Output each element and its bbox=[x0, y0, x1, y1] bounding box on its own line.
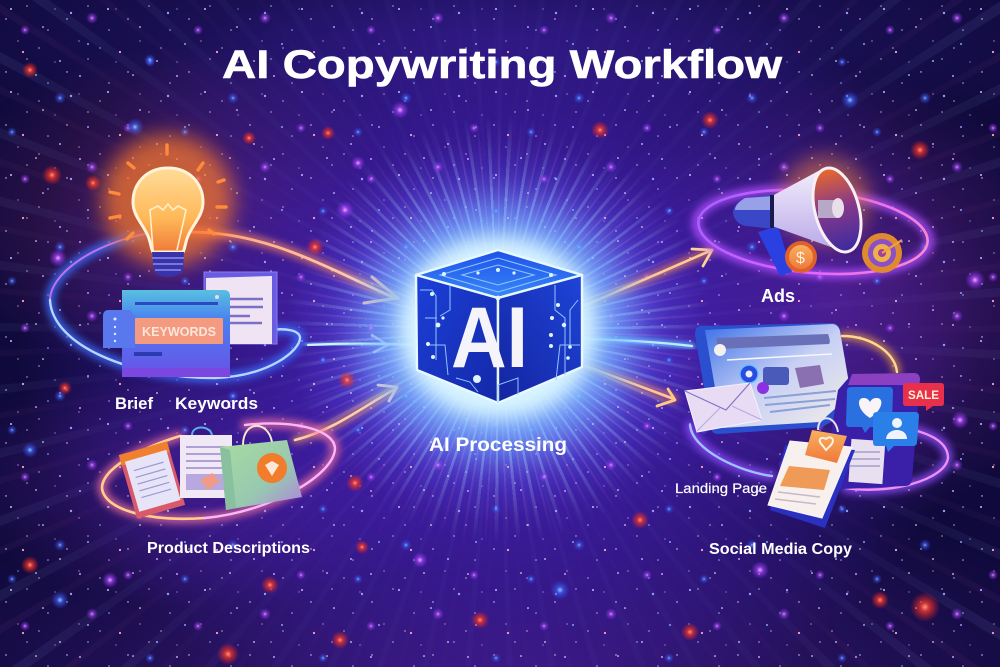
icon: heart bubble bbox=[846, 387, 893, 433]
icon: dollar coin bbox=[785, 241, 817, 273]
orbit ring: brief bbox=[50, 234, 300, 378]
cube outer glow bbox=[363, 205, 633, 455]
icon: light bulb bbox=[102, 134, 234, 277]
orbit ring: ads bbox=[693, 181, 933, 283]
label: Brief: Brief bbox=[115, 394, 153, 413]
circuit traces bbox=[420, 258, 580, 403]
arrow: AI to email and social bbox=[586, 366, 675, 406]
panel: AI cube bbox=[363, 205, 633, 455]
label: Ads: Ads bbox=[761, 286, 795, 306]
arrow: AI to ads bbox=[586, 249, 712, 305]
icon: product sheet bbox=[180, 428, 232, 498]
icon: brief folder bbox=[103, 290, 230, 377]
icon: social panel bbox=[822, 373, 920, 490]
arrow: keywords to AI bbox=[308, 335, 412, 352]
label: AI Processing: AI Processing bbox=[429, 435, 567, 456]
label: Social Media Copy: Social Media Copy bbox=[709, 541, 852, 558]
orbit ring: product bbox=[102, 424, 335, 519]
icon: shopping bag bbox=[220, 426, 302, 510]
keywords tag bbox=[135, 318, 223, 344]
arrow: AI to landing page bbox=[584, 339, 692, 346]
title: AI Copywriting Workflow bbox=[222, 43, 783, 87]
panel: brief and keywords bbox=[50, 134, 300, 378]
icon: dollar coin: $ bbox=[796, 250, 805, 267]
badge: sale: SALE bbox=[908, 388, 939, 402]
keywords tag: KEYWORDS bbox=[142, 325, 216, 339]
icon: person bubble bbox=[873, 412, 919, 452]
label: Product Descriptions: Product Descriptions bbox=[147, 540, 310, 557]
icon: envelope bbox=[685, 383, 762, 432]
arrow: product descriptions to AI bbox=[295, 385, 397, 440]
badge: sale bbox=[903, 383, 944, 411]
panel: ads bbox=[693, 156, 933, 283]
AI letters: AI bbox=[451, 290, 528, 386]
icon: clipboard with bag bbox=[768, 418, 855, 528]
icon: document sheet bbox=[204, 272, 277, 344]
label: Keywords: Keywords bbox=[175, 394, 258, 413]
cube body bbox=[416, 250, 582, 403]
cube inner glow bbox=[398, 236, 598, 420]
panel: product descriptions bbox=[102, 424, 335, 519]
arrow: brief to AI bbox=[190, 232, 398, 303]
icon: notepad bbox=[119, 441, 185, 519]
icon: target bbox=[862, 233, 902, 273]
icon: megaphone bbox=[733, 156, 869, 276]
panel: landing page and social bbox=[685, 323, 948, 528]
orbit ring: landing bbox=[690, 336, 948, 490]
label: Landing Page: Landing Page bbox=[675, 481, 767, 496]
icon: browser window bbox=[695, 323, 853, 434]
